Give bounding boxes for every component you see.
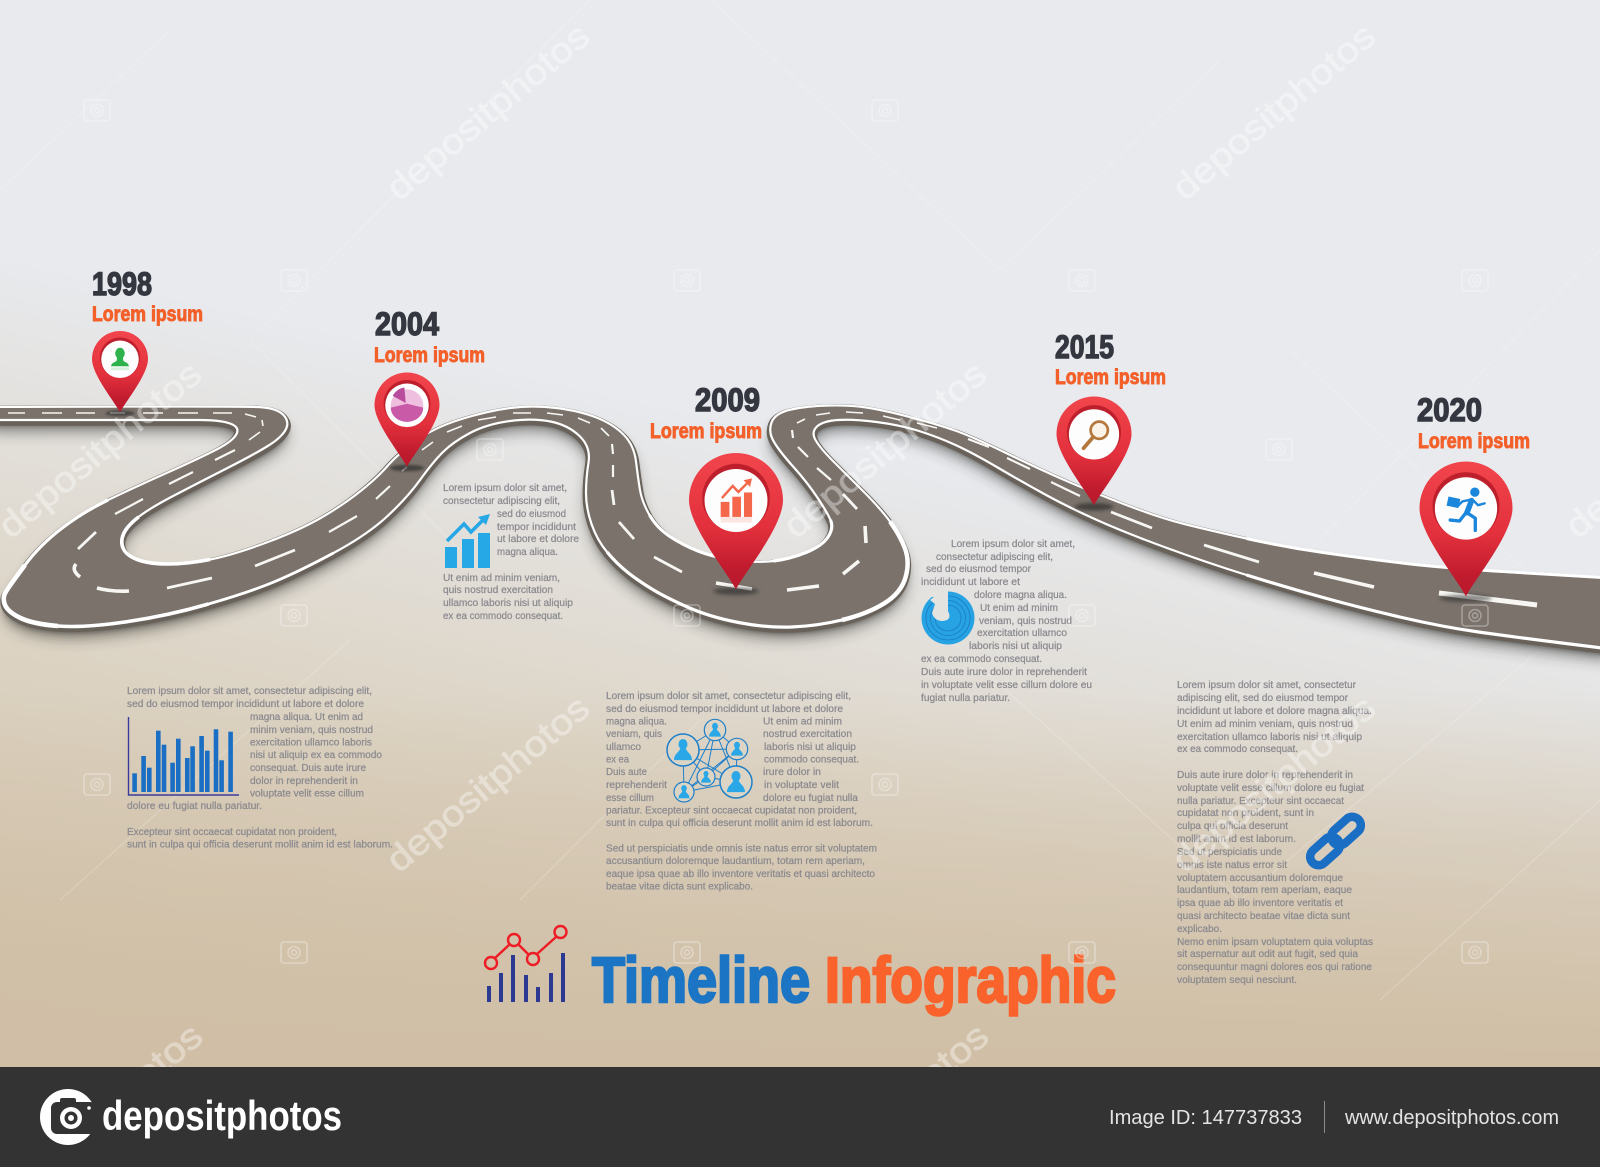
text block 1998 with bar chart: Lorem ipsum dolor sit amet, consectetur adipiscing elit, <box>127 686 372 697</box>
text block 2015 with radial icon: exercitation ullamco <box>977 628 1067 639</box>
text block 2020 with link icon: omnis iste natus error sit <box>1177 860 1287 871</box>
text block 2009 with people network: sed do eiusmod tempor incididunt ut labore et dolore <box>606 704 843 715</box>
pin 2009 with growth chart icon <box>689 453 783 595</box>
text block 2015 with radial icon: veniam, quis nostrud <box>979 616 1072 627</box>
footer logo icon <box>40 1089 96 1145</box>
text block 2004 with chart icon: magna aliqua. <box>497 547 558 558</box>
text block 2004 with chart icon: consectetur adipiscing elit, <box>443 496 560 507</box>
text block 2015 with radial icon: incididunt ut labore et <box>921 577 1020 588</box>
text block 2020 with link icon: voluptate velit esse cillum dolore eu fugiat <box>1177 783 1364 794</box>
text block 2009 with people network: in voluptate velit <box>764 780 839 791</box>
text block 1998 with bar chart: Excepteur sint occaecat cupidatat non proident, <box>127 827 337 838</box>
title text: Timeline <box>592 944 810 1016</box>
road soft shadow <box>0 417 1600 661</box>
text block 2020 with link icon: incididunt ut labore et dolore magna aliqua. <box>1177 706 1372 717</box>
text block 1998 with bar chart: dolore eu fugiat nulla pariatur. <box>127 801 262 812</box>
text block 2004 with chart icon: tempor incididunt <box>497 522 576 533</box>
text block 2004 with chart icon: Ut enim ad minim veniam, <box>443 573 560 584</box>
text block 2004 with chart icon: quis nostrud exercitation <box>443 585 553 596</box>
text block 2009 with people network: Ut enim ad minim <box>763 716 842 728</box>
text block 2004 with chart icon <box>443 483 579 622</box>
text block 2020 with link icon: Duis aute irure dolor in reprehenderit in <box>1177 770 1353 781</box>
text block 2020 with link icon: consequuntur magni dolores eos qui ratione <box>1177 962 1372 973</box>
text block 2015 with radial icon <box>921 539 1092 704</box>
bar chart <box>128 717 239 795</box>
watermark overlay: depositphotos <box>1164 15 1383 208</box>
text block 2015 with radial icon: ex ea commodo consequat. <box>921 654 1042 665</box>
watermark overlay: depositphotos <box>378 687 597 880</box>
text block 2009 with people network: laboris nisi ut aliquip <box>764 742 856 753</box>
text block 2015 with radial icon: fugiat nulla pariatur. <box>921 693 1010 704</box>
text block 2009 with people network: irure dolor in <box>763 767 821 778</box>
text block 2020 with link icon: Ut enim ad minim veniam, quis nostrud <box>1177 719 1353 730</box>
watermark overlay: depositphotos <box>378 15 597 208</box>
icon: people network <box>667 719 752 802</box>
text block 2020 with link icon: voluptatem sequi nesciunt. <box>1177 975 1297 986</box>
text block 1998 with bar chart: dolor in reprehenderit in <box>250 776 358 787</box>
text block 2009 with people network: commodo consequat. <box>764 754 859 766</box>
centre line dashes <box>8 412 1537 605</box>
text block 1998 with bar chart: exercitation ullamco laboris <box>250 738 372 748</box>
label: Lorem ipsum <box>1418 430 1530 453</box>
text block 1998 with bar chart <box>127 686 393 850</box>
watermark overlay: depositphotos <box>775 353 994 546</box>
road surface <box>0 405 1600 649</box>
text block 2004 with chart icon: ex ea commodo consequat. <box>443 611 563 622</box>
text block 2020 with link icon: exercitation ullamco laboris nisi ut aliquip <box>1177 732 1362 743</box>
text block 2009 with people network: ex ea <box>606 754 629 766</box>
text block 2020 with link icon: adipiscing elit, sed do eiusmod tempor <box>1177 693 1349 704</box>
text block 2009 with people network: veniam, quis <box>606 729 662 740</box>
text block 2009 with people network <box>606 691 877 892</box>
milestone 2009 <box>650 382 783 595</box>
footer logo text: depositphotos <box>102 1092 342 1139</box>
website: www.depositphotos.com <box>1344 1107 1559 1129</box>
text block 2004 with chart icon: Lorem ipsum dolor sit amet, <box>443 483 567 494</box>
text block 2004 with chart icon: ullamco laboris nisi ut aliquip <box>443 598 573 609</box>
image id: Image ID: 147737833 <box>1109 1107 1302 1129</box>
title text: Infographic <box>825 944 1116 1016</box>
text block 2009 with people network: reprehenderit <box>606 780 667 791</box>
text block 2020 with link icon: Lorem ipsum dolor sit amet, consectetur <box>1177 680 1357 691</box>
label: Lorem ipsum <box>92 303 203 326</box>
year 2004: 2004 <box>375 306 439 342</box>
text block 2009 with people network: Lorem ipsum dolor sit amet, consectetur adipiscing elit, <box>606 691 851 702</box>
text block 2020 with link icon: sit aspernatur aut odit aut fugit, sed quia <box>1177 949 1358 960</box>
text block 2009 with people network: magna aliqua. <box>606 716 667 728</box>
text block 2009 with people network: Sed ut perspiciatis unde omnis iste natus error sit voluptatem <box>606 844 877 854</box>
text block 2009 with people network: sunt in culpa qui officia deserunt mollit anim id est laborum. <box>606 818 873 829</box>
icon: line and bar chart <box>485 926 566 1002</box>
text block 1998 with bar chart: magna aliqua. Ut enim ad <box>250 712 363 723</box>
text block 2020 with link icon: ex ea commodo consequat. <box>1177 744 1298 755</box>
text block 2020 with link icon: Sed ut perspiciatis unde <box>1177 847 1282 858</box>
text block 2015 with radial icon: Duis aute irure dolor in reprehenderit <box>921 667 1087 678</box>
label: Lorem ipsum <box>650 420 762 443</box>
year 2020: 2020 <box>1417 392 1482 428</box>
text block 2009 with people network: beatae vitae dicta sunt explicabo. <box>606 882 753 892</box>
text block 2020 with link icon: cupidatat non proident, sunt in <box>1177 808 1314 819</box>
text block 1998 with bar chart: sunt in culpa qui officia deserunt mollit anim id est laborum. <box>127 840 393 850</box>
pin 2015 with magnifier icon <box>1056 396 1132 510</box>
pin 2020 with runner icon <box>1420 462 1512 602</box>
text block 2020 with link icon: Nemo enim ipsam voluptatem quia voluptas <box>1177 937 1373 948</box>
text block 2009 with people network: eaque ipsa quae ab illo inventore veritatis et quasi architecto <box>606 869 875 880</box>
text block 2020 with link icon: mollit anim id est laborum. <box>1177 834 1296 845</box>
text block 1998 with bar chart: consequat. Duis aute irure <box>250 763 366 774</box>
text block 2015 with radial icon: sed do eiusmod tempor <box>926 564 1032 575</box>
text block 2004 with chart icon: ut labore et dolore <box>497 534 579 545</box>
milestone 2004 <box>374 306 485 471</box>
road rim <box>0 408 1600 651</box>
icon: chain link <box>1307 813 1364 869</box>
label: Lorem ipsum <box>374 344 485 367</box>
text block 2020 with link icon: nulla pariatur. Excepteur sint occaecat <box>1177 796 1344 807</box>
footer bar <box>0 1067 1600 1167</box>
text block 2015 with radial icon: in voluptate velit esse cillum dolore eu <box>921 680 1092 691</box>
text block 1998 with bar chart: sed do eiusmod tempor incididunt ut labore et dolore <box>127 699 364 710</box>
text block 2015 with radial icon: consectetur adipiscing elit, <box>936 552 1053 563</box>
thick white edges on near curves <box>4 500 1600 649</box>
text block 2020 with link icon: culpa qui officia deserunt <box>1177 821 1288 832</box>
text block 2015 with radial icon: laboris nisi ut aliquip <box>969 641 1062 652</box>
year 2015: 2015 <box>1055 329 1114 365</box>
pin 1998 with person icon <box>92 331 148 416</box>
text block 2020 with link icon: explicabo. <box>1177 924 1222 935</box>
year 2009: 2009 <box>695 382 760 418</box>
text block 2020 with link icon: voluptatem accusantium doloremque <box>1177 873 1343 884</box>
text block 2020 with link icon: quasi architecto beatae vitae dicta sunt <box>1177 911 1350 922</box>
text block 2004 with chart icon: sed do eiusmod <box>497 509 566 520</box>
text block 2020 with link icon <box>1177 680 1373 986</box>
icon: rising bars <box>445 514 490 568</box>
icon: radial rings <box>922 590 974 644</box>
pin 2004 with pie chart icon <box>374 372 440 471</box>
text block 2009 with people network: ullamco <box>606 742 641 753</box>
text block 2009 with people network: pariatur. Excepteur sint occaecat cupidatat non proident, <box>606 806 857 816</box>
text block 2009 with people network: dolore eu fugiat nulla <box>763 793 858 804</box>
text block 1998 with bar chart: minim veniam, quis nostrud <box>250 725 373 736</box>
title <box>485 926 1116 1016</box>
text block 2009 with people network: Duis aute <box>606 767 647 778</box>
text block 2009 with people network: accusantium doloremque laudantium, totam rem aperiam, <box>606 856 865 867</box>
text block 2009 with people network: nostrud exercitation <box>763 729 852 740</box>
watermark overlay: depositphotos <box>1164 687 1383 880</box>
label: Lorem ipsum <box>1055 366 1166 389</box>
text block 2020 with link icon: ipsa quae ab illo inventore veritatis et <box>1177 898 1343 909</box>
road close shadow <box>0 411 1600 655</box>
text block 2015 with radial icon: Ut enim ad minim <box>980 603 1058 614</box>
text block 1998 with bar chart: voluptate velit esse cillum <box>250 788 364 800</box>
year 1998: 1998 <box>92 266 152 302</box>
milestone 2015 <box>1055 329 1166 510</box>
text block 2015 with radial icon: Lorem ipsum dolor sit amet, <box>951 539 1075 550</box>
text block 2015 with radial icon: dolore magna aliqua. <box>974 590 1067 601</box>
text block 2009 with people network: esse cillum <box>606 793 654 804</box>
title text <box>592 944 1116 1016</box>
milestone 2020 <box>1417 392 1530 602</box>
text block 2020 with link icon: laudantium, totam rem aperiam, eaque <box>1177 885 1352 896</box>
milestone 1998 <box>92 266 203 416</box>
text block 1998 with bar chart: nisi ut aliquip ex ea commodo <box>250 750 382 761</box>
road <box>0 405 1600 661</box>
